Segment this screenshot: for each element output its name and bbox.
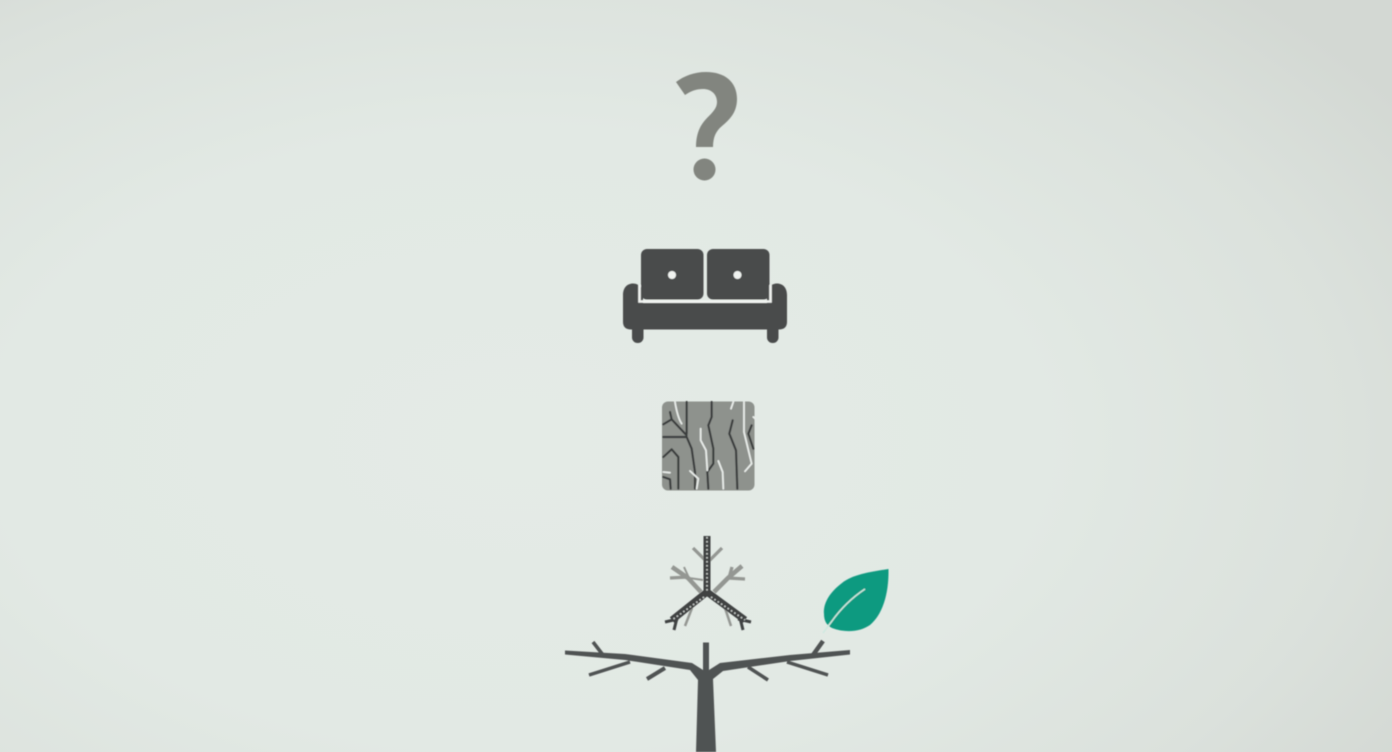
icon: couch	[623, 249, 787, 343]
icon: green leaf	[823, 569, 889, 633]
bark cracks	[663, 402, 755, 489]
dark main limbs	[672, 536, 745, 620]
icon: large bare tree	[565, 641, 850, 752]
icon: small branching twig	[665, 536, 751, 630]
icon: bark texture tile	[662, 402, 755, 490]
light beads on limbs	[672, 537, 745, 620]
icon: question mark	[676, 72, 737, 180]
grey back twigs	[670, 548, 745, 626]
